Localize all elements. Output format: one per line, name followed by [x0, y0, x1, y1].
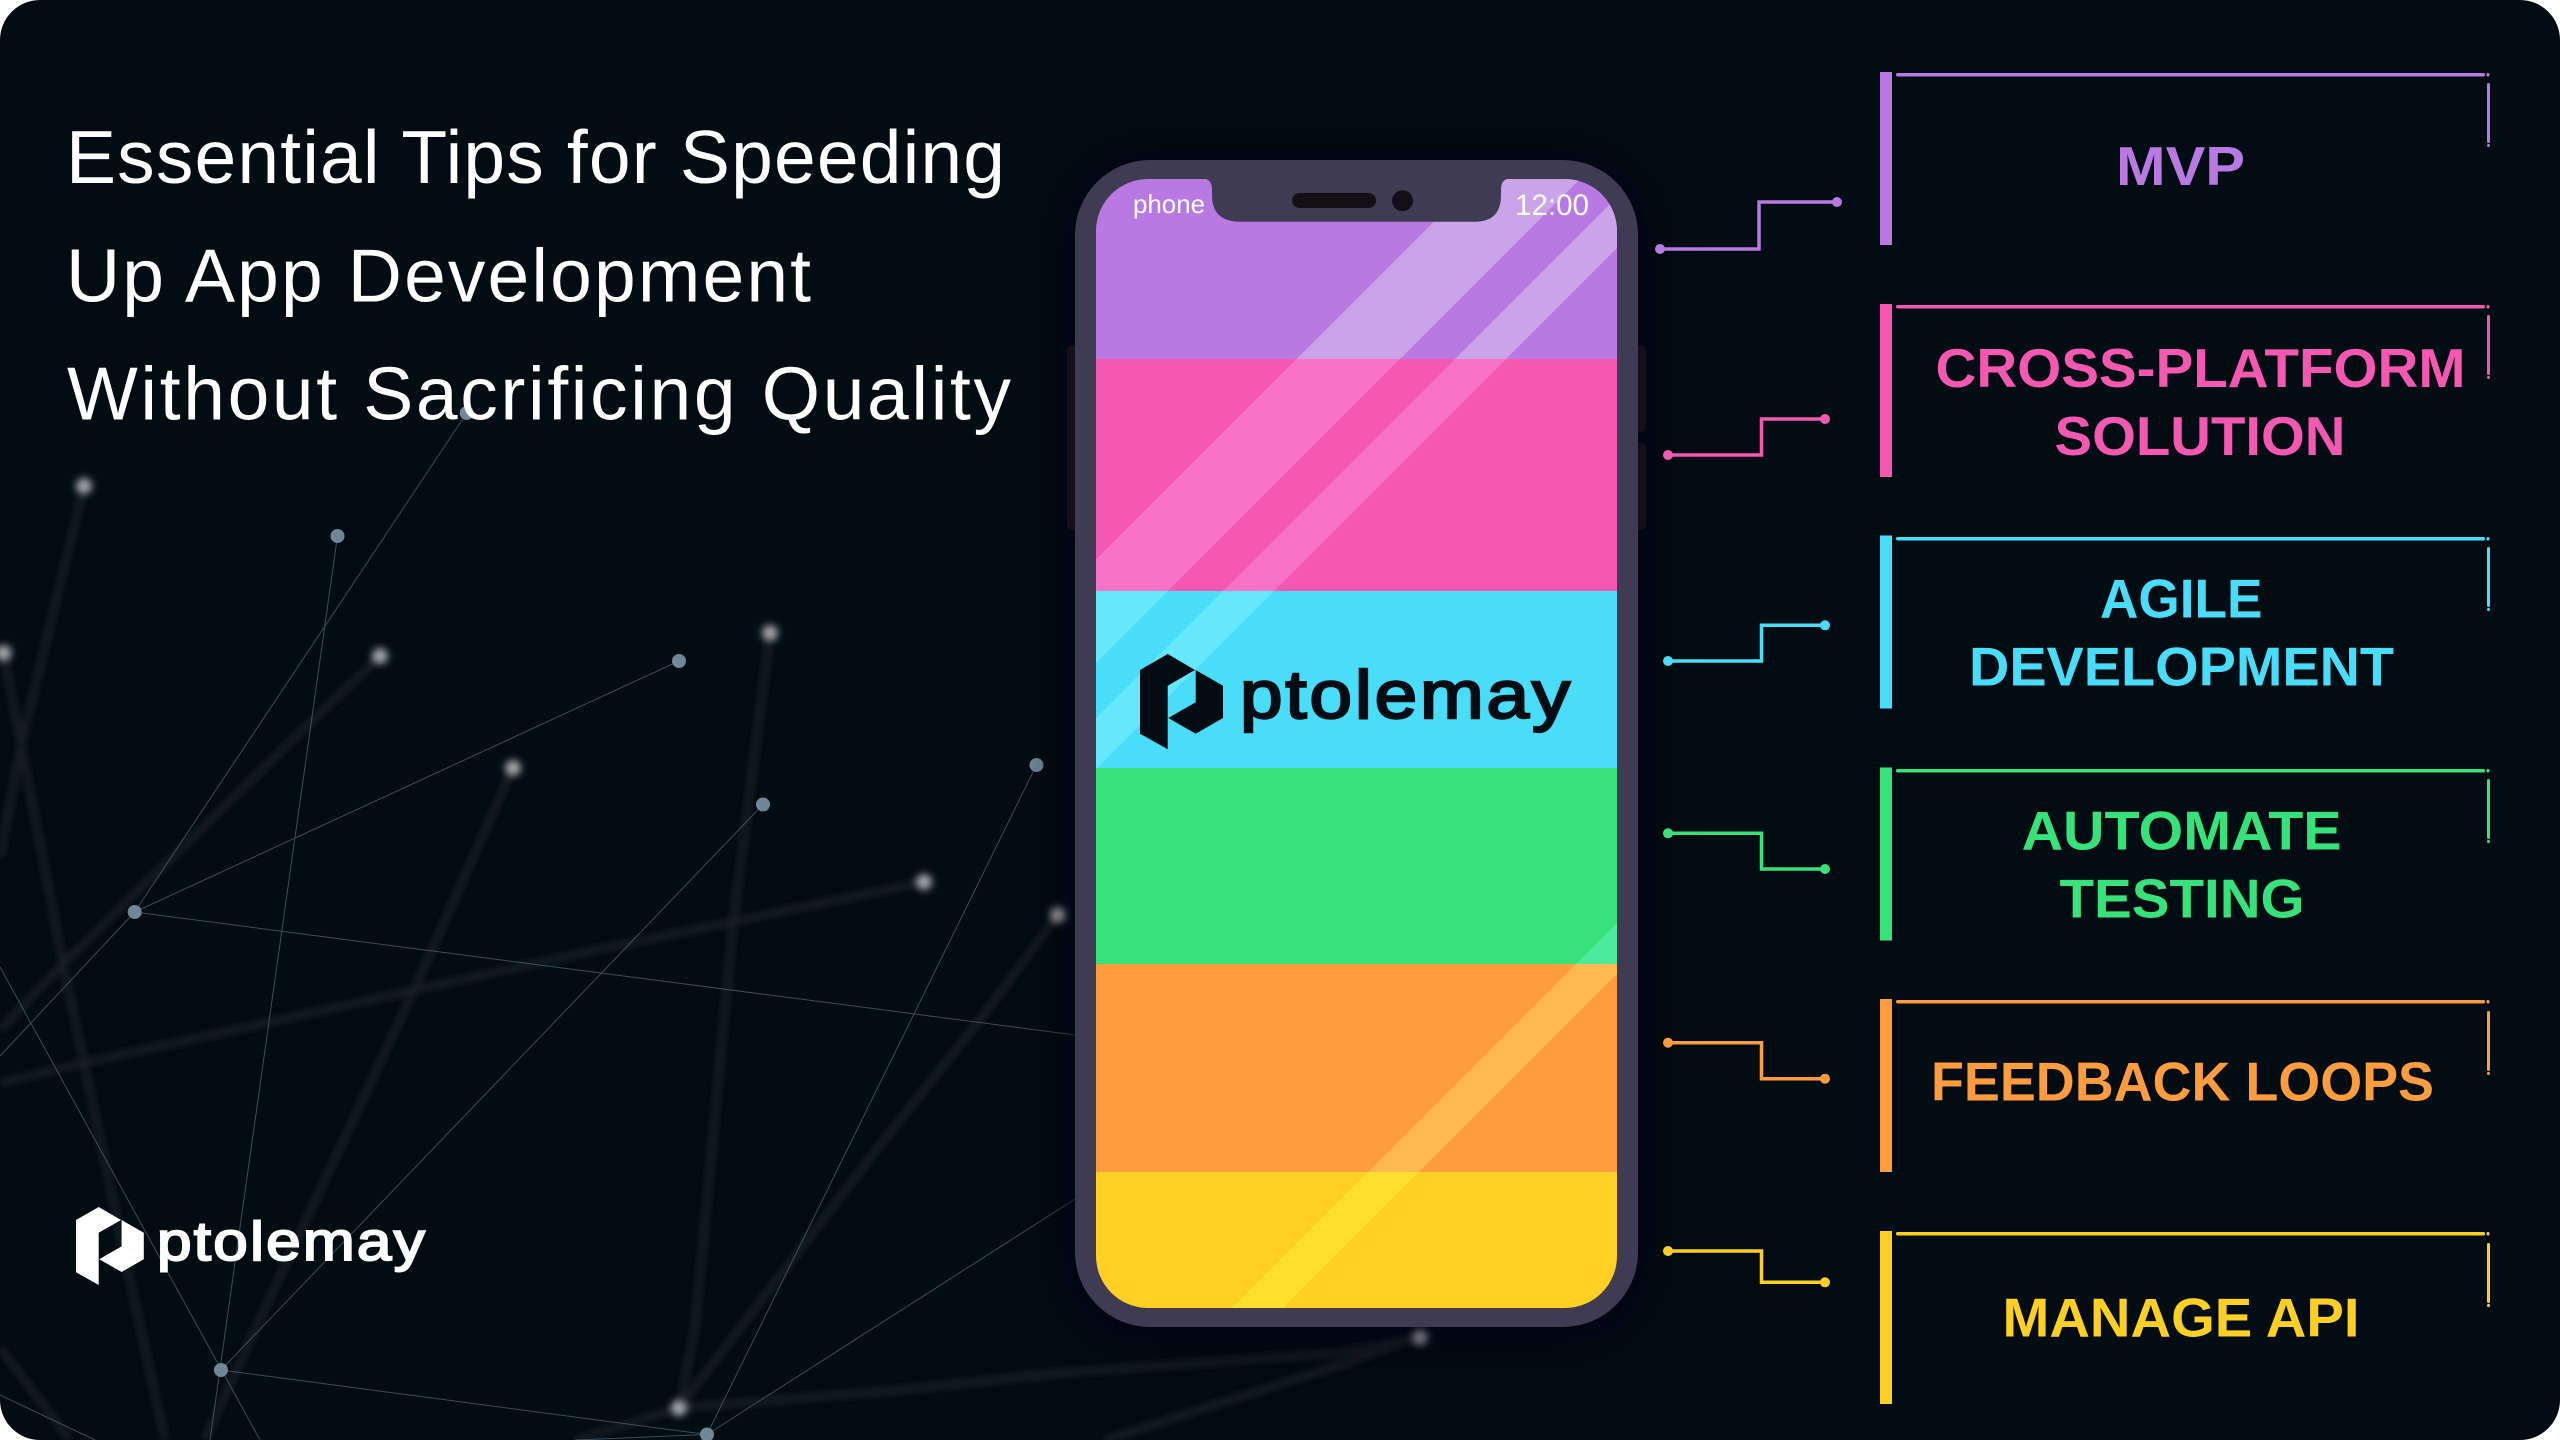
- notch: [1202, 178, 1511, 222]
- colour band: purple: [1096, 179, 1617, 359]
- panel: agile development: AGILE: [2100, 568, 2262, 630]
- panel: automate testing: AUTOMATE: [2022, 800, 2342, 862]
- panel: agile development: [1880, 536, 2490, 708]
- title: Up App Development: [66, 234, 811, 318]
- colour band: orange: [1096, 964, 1617, 1172]
- panel: agile development: DEVELOPMENT: [1969, 636, 2394, 698]
- panel: automate testing: [1880, 768, 2490, 940]
- title: [66, 115, 1012, 436]
- panel: manage api: MANAGE API: [2002, 1287, 2360, 1349]
- status text: time: 12:00: [1515, 189, 1589, 222]
- speaker: [1292, 193, 1376, 208]
- title: Essential Tips for Speeding: [66, 115, 1005, 199]
- title: Without Sacrificing Quality: [67, 352, 1012, 436]
- background network pattern: [0, 406, 1428, 1440]
- phone shadow: [1062, 150, 1652, 1345]
- phone: [1035, 160, 1646, 1349]
- phone frame: [1075, 160, 1638, 1327]
- colour band: cyan: [1096, 591, 1617, 768]
- connector: automate: [1664, 830, 1828, 872]
- colour band: green: [1096, 768, 1617, 964]
- panel: feedback loops: FEEDBACK LOOPS: [1931, 1051, 2434, 1113]
- panel: manage api: [1880, 1231, 2490, 1404]
- panel: automate testing: TESTING: [2060, 868, 2304, 930]
- logo: ptolemay on screen: ptolemay: [1240, 657, 1573, 733]
- connector: MVP: [1656, 198, 1840, 252]
- panel: cross-platform solution: CROSS-PLATFORM: [1936, 337, 2466, 399]
- colour band: pink: [1096, 359, 1617, 591]
- side buttons: [1067, 345, 1646, 530]
- connector: cross-platform: [1664, 416, 1828, 458]
- panel: MVP: [1880, 72, 2490, 245]
- panel: cross-platform solution: [1880, 304, 2490, 477]
- connector: manage api: [1664, 1248, 1828, 1286]
- colour band: yellow: [1096, 1172, 1617, 1308]
- phone screen: [1096, 179, 1617, 1308]
- logo: ptolemay white: ptolemay: [157, 1210, 427, 1272]
- connector: agile: [1664, 622, 1828, 664]
- connector: feedback: [1664, 1039, 1828, 1082]
- logo: ptolemay white: [76, 1207, 427, 1285]
- logo: ptolemay on screen: [1140, 654, 1573, 749]
- panel: feedback loops: [1880, 999, 2490, 1172]
- status text: phone: phone: [1133, 189, 1205, 219]
- panel: cross-platform solution: SOLUTION: [2054, 405, 2346, 467]
- panel: MVP: MVP: [2116, 135, 2245, 197]
- camera: [1392, 190, 1413, 211]
